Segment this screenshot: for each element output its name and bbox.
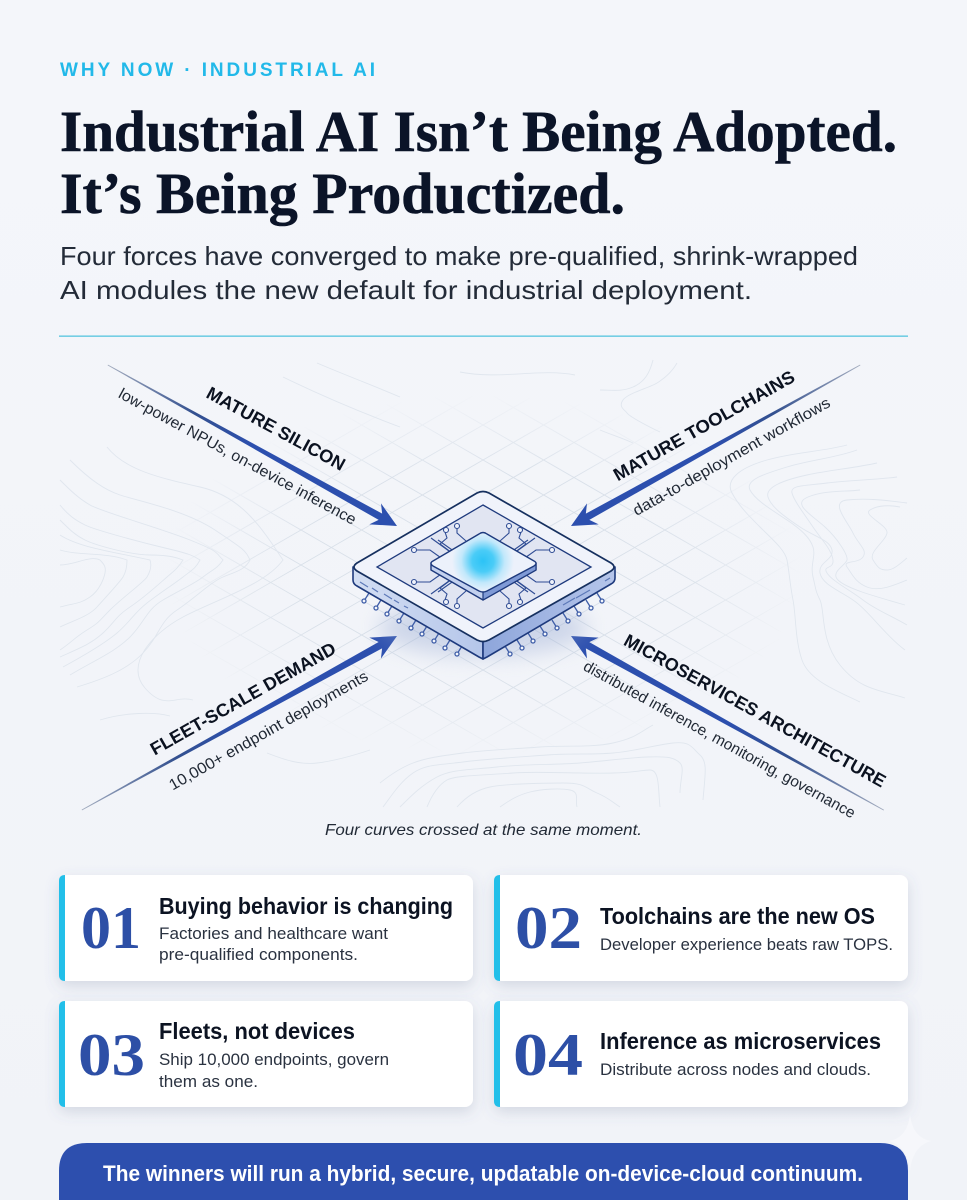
right [730, 445, 860, 702]
subtitle [60, 241, 858, 305]
label: fleet-scale demand: 10,000+ endpoint deployments [166, 668, 372, 794]
card 04: Distribute across nodes and clouds. [600, 1061, 871, 1079]
card 02 [494, 875, 908, 981]
label: mature toolchains: data-to-deployment workflows [630, 394, 834, 520]
subtitle: Four forces have converged to make pre-qualified, shrink-wrapped [60, 241, 858, 271]
card 01: pre-qualified components. [159, 946, 358, 964]
card 04: Inference as microservices [600, 1028, 881, 1054]
card 03 [59, 1001, 473, 1107]
bottom [380, 725, 653, 783]
label: fleet-scale demand: FLEET-SCALE DEMAND [147, 638, 339, 759]
icon: AI chip [353, 492, 615, 659]
card 02: Toolchains are the new OS [600, 903, 875, 929]
card 03: 03 [78, 1022, 145, 1088]
arrow: microservices architecture [565, 626, 890, 821]
card 03: Fleets, not devices [159, 1018, 355, 1044]
top [283, 377, 400, 427]
label: microservices architecture: distributed inference, monitoring, governance [580, 658, 858, 822]
card 02: Developer experience beats raw TOPS. [600, 936, 893, 954]
label: mature silicon: MATURE SILICON [203, 383, 349, 475]
circuit traces [412, 524, 554, 608]
title [60, 99, 897, 226]
eyebrow: WHY NOW · INDUSTRIAL AI [60, 60, 375, 81]
card 01: 01 [81, 895, 141, 961]
title: It’s Being Productized. [60, 161, 625, 226]
card 04: 04 [513, 1022, 583, 1088]
card 03: them as one. [159, 1073, 258, 1091]
card 01: Factories and healthcare want [159, 925, 388, 943]
arrow: fleet-scale demand [76, 625, 403, 820]
chip body sides [353, 567, 483, 659]
left [107, 447, 283, 701]
icon: sparkle [889, 1115, 931, 1170]
center die [431, 563, 536, 600]
chip top plate [354, 492, 614, 642]
card 02: 02 [515, 895, 582, 961]
label: fleet-scale demand [147, 638, 372, 794]
label: mature silicon: low-power NPUs, on-device inference [115, 385, 359, 529]
caption: Four curves crossed at the same moment. [325, 822, 642, 839]
label: mature toolchains: MATURE TOOLCHAINS [610, 367, 798, 485]
card 01 [59, 875, 473, 981]
arrow: mature toolchains [565, 355, 866, 536]
label: mature toolchains [610, 367, 834, 520]
conclusion banner [59, 1143, 908, 1200]
subtitle: AI modules the new default for industrial deployment. [60, 275, 752, 305]
title: Industrial AI Isn’t Being Adopted. [60, 99, 897, 164]
conclusion banner: The winners will run a hybrid, secure, updatable on-device-cloud continuum. [103, 1161, 863, 1186]
card 04 [494, 1001, 908, 1107]
card 03: Ship 10,000 endpoints, govern [159, 1051, 389, 1069]
label: microservices architecture: MICROSERVICES ARCHITECTURE [621, 630, 889, 791]
background grid and contours [60, 360, 907, 808]
chip pins [362, 593, 604, 656]
chip inner ring [377, 505, 591, 628]
arrow: mature silicon [102, 355, 403, 536]
card 01: Buying behavior is changing [159, 893, 453, 919]
